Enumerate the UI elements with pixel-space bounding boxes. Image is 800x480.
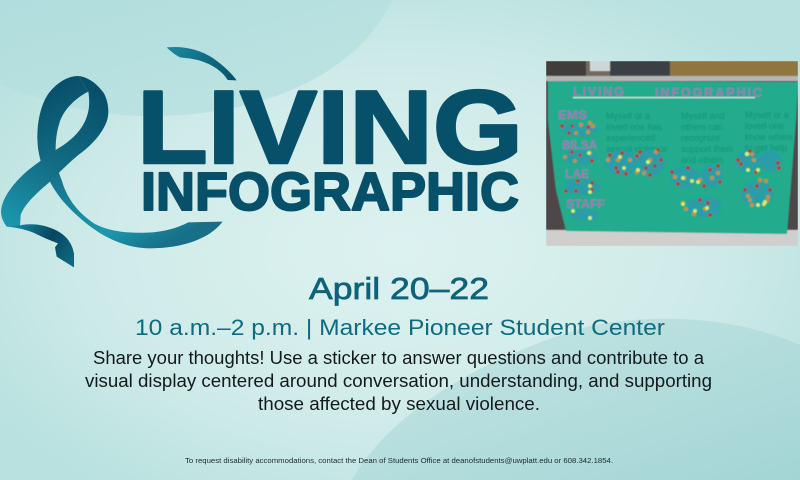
accessibility note: To request disability accommodations, contact the Dean of Students Office at deanofstudents@uwplatt.edu or 608.342.1854.: [185, 458, 613, 465]
description: Share your thoughts! Use a sticker to answer questions and contribute to a: [93, 348, 705, 368]
poster handwritten questions: loved one: [745, 121, 784, 131]
poster handwritten questions: recognize: [681, 133, 720, 143]
poster handwritten questions: Myself and: [681, 111, 725, 121]
description: visual display centered around conversation, understanding, and supporting: [85, 371, 712, 391]
poster handwritten questions: [606, 110, 793, 165]
poster handwritten questions: and others: [681, 155, 724, 165]
photo: living infographic poster: [546, 61, 798, 246]
poster handwritten questions: Myself or a: [745, 110, 789, 120]
poster sticker shadows: [562, 124, 781, 221]
background shape: bottom right curve: [352, 319, 800, 480]
poster heading: INFOGRAPHIC: [655, 85, 763, 100]
poster handwritten questions: experienced: [606, 133, 655, 143]
poster stickers: [560, 124, 780, 216]
poster handwritten questions: sexual violence: [606, 144, 668, 154]
poster handwritten questions: Myself or a: [606, 111, 650, 121]
icon: awareness ribbon: [1, 47, 237, 267]
poster row labels: STAFF: [566, 197, 605, 211]
poster row labels: [558, 108, 605, 211]
poster heading: LIVING: [573, 84, 624, 99]
title: Living Infographic: INFOGRAPHIC: [141, 162, 519, 222]
title: Living Infographic: [137, 70, 523, 222]
poster handwritten questions: others can: [681, 122, 723, 132]
poster row labels: LAE: [565, 167, 589, 181]
poster row labels: BILSA: [562, 138, 597, 152]
time and location: 10 a.m.–2 p.m. | Markee Pioneer Student Center: [135, 315, 665, 340]
poster handwritten questions: know where: [745, 132, 793, 142]
date: April 20–22: [309, 271, 489, 306]
poster handwritten questions: to get help: [745, 143, 787, 153]
description: [85, 348, 712, 414]
background shape: top arc: [0, 0, 392, 116]
poster handwritten questions: loved one has: [606, 122, 663, 132]
poster handwritten questions: support them: [681, 144, 734, 154]
title: Living Infographic: LIVING: [137, 70, 523, 186]
poster row labels: EMS: [558, 108, 587, 122]
poster heading: [573, 86, 762, 98]
description: those affected by sexual violence.: [258, 394, 540, 414]
